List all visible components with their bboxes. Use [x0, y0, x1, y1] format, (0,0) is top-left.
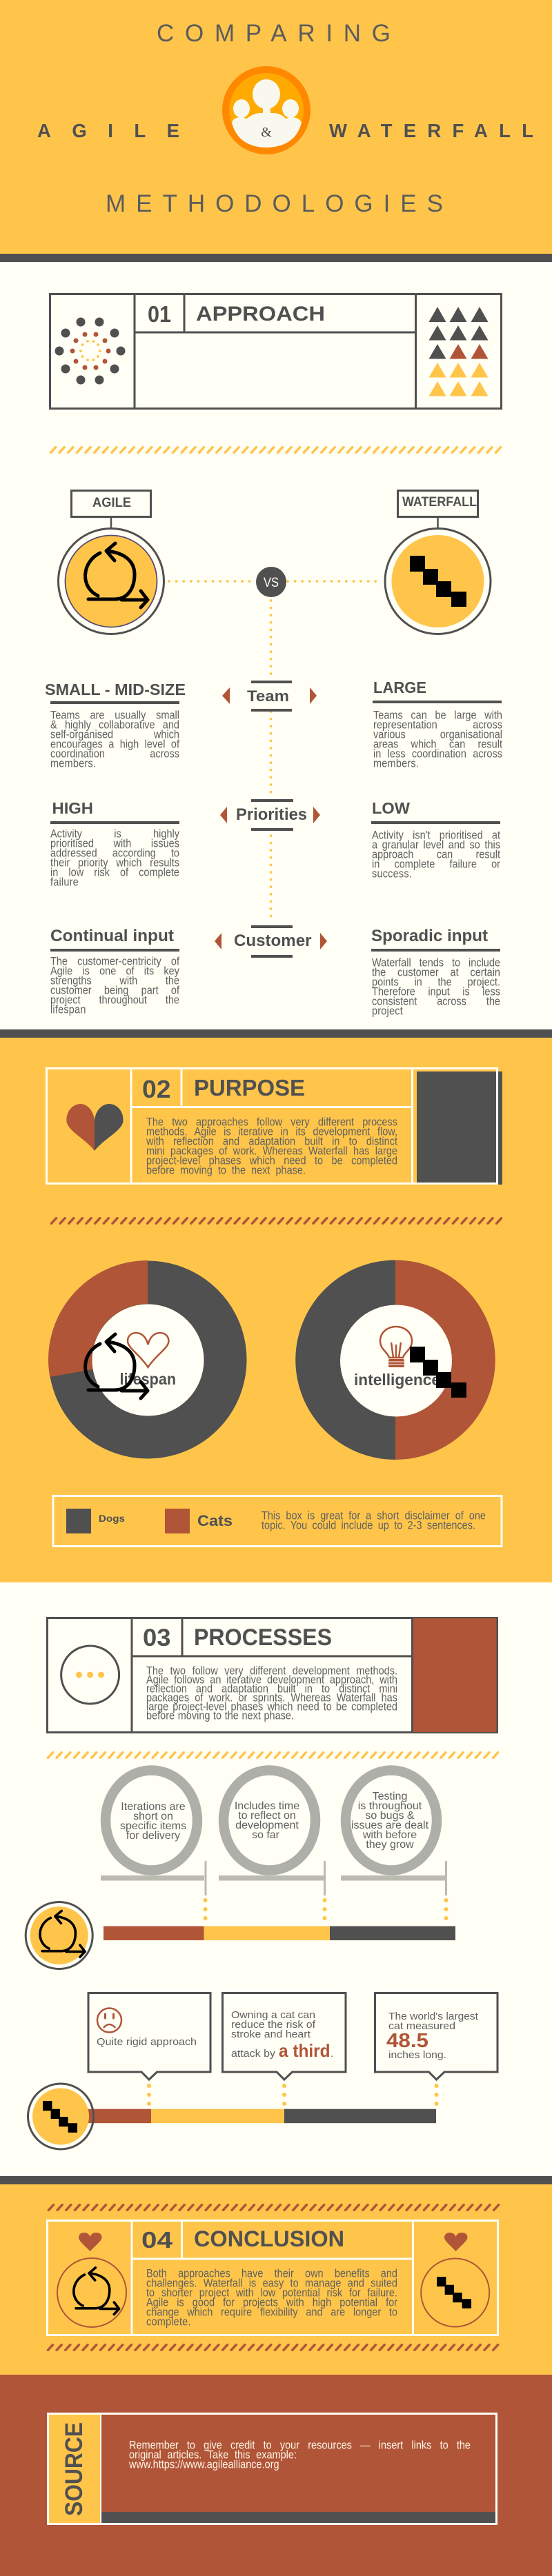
text: processes body: packages of work. or sprints. Whereas Waterfall has	[146, 1692, 397, 1704]
text: team waterfall: members.	[373, 758, 419, 770]
stripe divider	[46, 2344, 500, 2351]
title: agile: AGILE	[37, 120, 179, 141]
icon: team logo: &	[261, 125, 272, 140]
heading: conclusion: CONCLUSION	[194, 2226, 344, 2251]
text: team waterfall: Teams can be large with	[373, 710, 502, 722]
title: methodologies: METHODOLOGIES	[106, 190, 443, 217]
text: conclusion body: challenges. Waterfall is easy to manage and suited	[146, 2277, 397, 2290]
icon: waterfall badge	[385, 528, 491, 634]
icon: light bulb	[380, 1327, 412, 1367]
label: team: Team	[247, 687, 289, 705]
stripe divider	[50, 1217, 502, 1225]
text: processes body: before moving to the next phase.	[146, 1710, 294, 1722]
stripe divider	[46, 1751, 499, 1759]
vs badge	[256, 567, 286, 597]
text: customer agile: strengths with the	[50, 975, 179, 987]
panel: source	[48, 2413, 497, 2524]
text: team waterfall: representation across	[373, 719, 502, 732]
text: team waterfall	[373, 710, 502, 770]
label: agile: AGILE	[92, 496, 131, 510]
label: waterfall	[397, 491, 477, 529]
text: team agile: self-organised which	[50, 729, 179, 741]
icon: heart right	[444, 2233, 468, 2251]
text: legend disclaimer: This box is great for a short disclaimer of one	[262, 1510, 486, 1522]
callout ring 3: with before	[362, 1829, 417, 1841]
text: priorities agile	[50, 828, 179, 889]
text: priorities agile: Activity is highly	[50, 828, 179, 841]
text: customer agile	[50, 956, 179, 1016]
text: purpose body: before moving to the next phase.	[146, 1165, 306, 1177]
icon: team logo	[222, 66, 310, 154]
callout ring 1: short on	[133, 1811, 173, 1822]
icon: agile loop overlay	[86, 1334, 148, 1398]
text: team agile: encourages a high level of	[50, 738, 179, 751]
conclusion background	[0, 2184, 552, 2375]
text: processes body: reflection and adaptation built in to distinct mini	[146, 1683, 397, 1695]
section number 01: 01	[148, 301, 171, 327]
text: processes body: The two follow very different development methods.	[146, 1665, 397, 1678]
heading: low: LOW	[372, 799, 410, 817]
title: waterfall: WATERFALL	[329, 120, 533, 141]
text: customer agile: customer being part of	[50, 985, 179, 997]
callout ring 3: is throughout	[358, 1800, 422, 1812]
label: intelligence: intelligence	[354, 1371, 440, 1389]
rule	[373, 701, 502, 703]
text: legend disclaimer: topic. You could include up to 2-3 sentences.	[262, 1520, 475, 1532]
section band	[0, 2176, 552, 2184]
text: conclusion body: Agile is good for projects with high potential for	[146, 2297, 397, 2309]
callout: world's largest cat	[375, 1993, 497, 2080]
text: priorities agile: failure	[50, 876, 79, 889]
callout ring 1	[101, 1771, 207, 1895]
callout ring 2: so far	[252, 1829, 280, 1841]
stripe divider	[49, 446, 502, 454]
text: purpose body: The two approaches follow very different process	[146, 1116, 397, 1129]
section number 04: 04	[141, 2227, 173, 2253]
text: team agile	[50, 710, 179, 770]
text: customer agile: Agile is one of its key	[50, 965, 179, 978]
icon: sad face	[97, 2008, 121, 2033]
text: team agile: & highly collaborative and	[50, 719, 179, 732]
heading: processes: PROCESSES	[194, 1624, 332, 1651]
text: priorities agile: in low risk of complete	[50, 867, 179, 879]
text: purpose body: with reflection and adaptation built in to distinct	[146, 1136, 397, 1148]
text: customer waterfall: Therefore input is less	[372, 986, 500, 998]
callout: owning a cat: attack by	[231, 2048, 276, 2060]
text: processes body	[146, 1665, 397, 1722]
section number 03: 03	[143, 1624, 171, 1651]
rule	[50, 701, 179, 704]
text: priorities waterfall: a granular level and so this	[372, 839, 500, 852]
text: conclusion body: complete.	[146, 2316, 191, 2328]
heading: purpose: PURPOSE	[194, 1075, 305, 1100]
text: source body	[129, 2439, 471, 2471]
icon: heart left	[79, 2233, 102, 2251]
text: team agile: Teams are usually small	[50, 710, 179, 722]
text: source body: Remember to give credit to your resources — insert links to the	[129, 2439, 471, 2452]
label: customer	[215, 925, 327, 958]
text: customer waterfall: points in the project.	[372, 976, 500, 989]
label: priorities: Priorities	[236, 805, 307, 824]
legend label: dogs: Dogs	[99, 1513, 125, 1524]
text: team waterfall: various organisational	[373, 729, 502, 741]
text: processes body: large project-level phases which need to be completed	[146, 1701, 397, 1713]
timeline: waterfall bar	[88, 2109, 436, 2123]
title: comparing: COMPARING	[157, 20, 391, 47]
text: customer agile: lifespan	[50, 1004, 86, 1016]
icon: heart outline	[128, 1333, 168, 1367]
legend box	[53, 1496, 502, 1546]
callout ring 3: Testing	[373, 1791, 407, 1802]
text: conclusion body: Both approaches have their own benefits and	[146, 2268, 397, 2280]
text: conclusion body: change which require flexibility and are longer to	[146, 2306, 397, 2319]
icon: agile timeline badge	[26, 1902, 92, 1969]
heading: large: LARGE	[373, 678, 426, 696]
callout ring 2: to reflect on	[238, 1810, 296, 1822]
label: waterfall: WATERFALL	[402, 495, 477, 510]
heading: continual input: Continual input	[50, 927, 174, 945]
text: source body: original articles. Take this example:	[129, 2449, 297, 2462]
callout ring 3	[341, 1771, 447, 1895]
text: customer waterfall: project	[372, 1005, 403, 1018]
text: priorities waterfall: success.	[372, 868, 412, 881]
text: purpose body	[146, 1116, 397, 1177]
swatch: dogs	[66, 1509, 91, 1533]
heading: small mid-size: SMALL - MID-SIZE	[45, 681, 186, 698]
panel: 01 approach header	[50, 294, 501, 409]
text: team agile: members.	[50, 758, 96, 770]
connector dots	[147, 2084, 439, 2106]
callout: world's largest cat: inches long.	[388, 2049, 446, 2061]
callout ring 1: for delivery	[126, 1830, 180, 1842]
icon: ellipsis circle	[61, 1646, 119, 1704]
callout ring 3: issues are dealt	[351, 1820, 429, 1831]
icon: waterfall timeline badge	[28, 2084, 94, 2149]
text: customer waterfall: consistent across the	[372, 996, 500, 1008]
icon: dots burst	[55, 317, 126, 385]
connector dots	[169, 581, 378, 923]
text: conclusion body	[146, 2268, 397, 2328]
rule	[50, 949, 179, 952]
callout: quite rigid approach: Quite rigid approach	[97, 2036, 197, 2048]
callout: owning a cat: stroke and heart	[231, 2029, 311, 2040]
callout ring 3: they grow	[366, 1839, 414, 1851]
legend label: cats: Cats	[197, 1512, 233, 1529]
vs badge: VS	[264, 576, 279, 590]
text: processes body: Agile follows an iterative development approach, with	[146, 1674, 397, 1687]
rule	[371, 949, 500, 952]
callout ring 2: Includes time	[235, 1800, 299, 1812]
text: team waterfall: in less coordination across	[373, 748, 502, 761]
panel: 04 conclusion header	[47, 2220, 498, 2335]
callout ring 3: so bugs &	[365, 1810, 415, 1822]
connector dots	[203, 1898, 448, 1920]
callout ring 2: development	[235, 1820, 299, 1831]
text: purpose body: mini packages of work. Whereas Waterfall has large	[146, 1145, 397, 1158]
text: customer waterfall	[372, 957, 500, 1018]
callout: owning a cat: .	[331, 2048, 333, 2060]
text: priorities agile: their priority which results	[50, 857, 179, 869]
label: lifespan: lifespan	[120, 1370, 176, 1388]
callout: owning a cat: a third	[279, 2040, 331, 2061]
panel: 02 purpose header	[47, 1068, 502, 1185]
icon: agile conclusion badge	[57, 2258, 126, 2327]
heading: source: SOURCE	[61, 2422, 88, 2516]
purpose background	[0, 1038, 552, 1582]
chart: intelligence donut	[295, 1260, 495, 1460]
label: team	[222, 681, 317, 712]
icon: agile loop badge	[58, 528, 164, 634]
label: priorities	[220, 799, 320, 831]
text: conclusion body: to shorter project with low potential risk for failure.	[146, 2287, 397, 2300]
callout: world's largest cat: The world's largest	[388, 2011, 479, 2022]
header band	[0, 254, 552, 262]
callout: quite rigid approach	[88, 1993, 210, 2080]
header background	[0, 0, 552, 254]
text: team agile: coordination across	[50, 748, 179, 761]
text: priorities waterfall: in complete failure or	[372, 858, 500, 871]
text: legend disclaimer	[262, 1510, 486, 1532]
swatch: cats	[165, 1509, 190, 1533]
panel: 03 processes header	[47, 1618, 497, 1733]
section band	[0, 1029, 552, 1038]
icon: waterfall conclusion badge	[421, 2259, 489, 2326]
rule	[50, 821, 179, 824]
section number 02: 02	[142, 1075, 171, 1103]
icon: triangle grid	[429, 307, 489, 396]
source background	[0, 2375, 552, 2576]
callout: owning a cat: Owning a cat can	[231, 2009, 315, 2021]
text: priorities waterfall: approach can result	[372, 849, 500, 861]
text: team waterfall: areas which can result	[373, 738, 502, 751]
text: purpose body: project-level phases which need to be completed	[146, 1155, 397, 1167]
chart: lifespan donut	[48, 1260, 225, 1437]
heading: high: HIGH	[52, 799, 93, 817]
callout: owning a cat	[222, 1993, 346, 2080]
heading: sporadic input: Sporadic input	[371, 927, 488, 945]
callout ring 1: specific items	[120, 1820, 186, 1832]
callout: world's largest cat: cat measured	[388, 2020, 455, 2032]
text: priorities waterfall: Activity isn't prioritised at	[372, 829, 500, 842]
text: customer waterfall: Waterfall tends to include	[372, 957, 500, 969]
label: agile	[72, 491, 150, 529]
callout ring 1: Iterations are	[121, 1801, 186, 1813]
heading: approach: APPROACH	[196, 303, 325, 325]
stripe divider	[47, 2204, 500, 2211]
callout: owning a cat: reduce the risk of	[231, 2019, 316, 2031]
icon: waterfall steps overlay	[410, 1347, 466, 1398]
label: customer: Customer	[234, 932, 312, 950]
timeline: agile bar	[103, 1926, 455, 1940]
text: customer waterfall: the customer at certain	[372, 967, 500, 979]
text: customer agile: project throughout the	[50, 994, 179, 1007]
text: priorities waterfall	[372, 829, 500, 881]
callout: world's largest cat: 48.5	[386, 2030, 428, 2052]
text: source body: www.https://www.agilealliance.org	[129, 2459, 279, 2471]
icon: two-tone heart	[66, 1104, 124, 1151]
rule	[371, 821, 500, 824]
text: priorities agile: prioritised with issues	[50, 838, 179, 850]
text: priorities agile: addressed according to	[50, 847, 179, 860]
text: purpose body: methods. Agile is iterative in its development flow,	[146, 1126, 397, 1138]
text: customer agile: The customer-centricity of	[50, 956, 179, 968]
callout ring 2	[219, 1771, 326, 1895]
